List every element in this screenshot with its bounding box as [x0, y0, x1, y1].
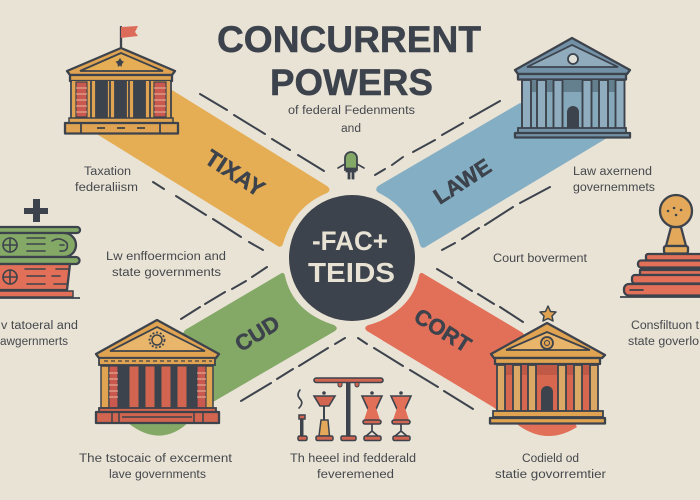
label: right edge: Consfiltuon t [631, 320, 700, 332]
label: court: Court boverment [493, 253, 588, 265]
icon: small figure [338, 152, 364, 179]
band label: CORT: CORT [410, 303, 476, 358]
band label: TIXAY: TIXAY [200, 144, 270, 202]
label: left edge: v tatoeral and [1, 320, 78, 332]
label: bottom right [495, 453, 606, 481]
subtitle [288, 105, 415, 135]
label: bottom left: The tstocaic of excerment [79, 453, 233, 465]
label: right edge [628, 320, 700, 348]
center circle: -FAC+ [312, 226, 388, 256]
label: law enforcement [106, 251, 226, 279]
label: bottom right: Codield od [522, 453, 579, 465]
title: POWERS [270, 62, 433, 103]
icon: red band building [490, 306, 605, 424]
label: bottom center [290, 453, 416, 481]
label: law amend: Law axernend [573, 166, 652, 178]
label: law enforcement: Lw enffoermcion and [106, 251, 226, 263]
subtitle: of federal Fedenments [288, 105, 415, 117]
label: left edge: awgernmerts [0, 336, 68, 348]
subtitle: and [341, 123, 361, 135]
label: bottom left [79, 453, 233, 481]
label: law amend [573, 166, 655, 194]
label: taxation [75, 166, 138, 194]
band label: CUD: CUD [230, 310, 284, 357]
label: bottom right: statie govorremtier [495, 469, 606, 481]
label: bottom left: lave governments [109, 469, 206, 481]
band: law [376, 103, 607, 248]
title [217, 19, 481, 103]
band: taxation [95, 90, 330, 247]
center circle [283, 189, 421, 327]
icon: yellow building with flag [65, 26, 178, 134]
label: law enforcement: state governments [112, 267, 221, 279]
center circle: TEIDS [308, 257, 395, 288]
icon: stacked law books with plus [0, 199, 80, 298]
label: left edge [0, 320, 78, 348]
label: taxation: federaliism [75, 182, 138, 194]
dashed connector lines [153, 94, 550, 409]
label: bottom center: Th heeel ind fedderald [290, 453, 416, 465]
icon: green band building [96, 320, 219, 423]
icon: blue building [515, 38, 630, 138]
band: cud [128, 273, 337, 436]
band label: LAWE: LAWE [429, 154, 496, 209]
label: law amend: governemmets [573, 182, 655, 194]
title: CONCURRENT [217, 19, 481, 60]
label: bottom center: feveremened [317, 469, 394, 481]
icon: scales and goblets [298, 378, 411, 440]
icon: pedestal with round head [620, 195, 700, 297]
label: right edge: state goverlo [628, 336, 699, 348]
label: taxation: Taxation [84, 166, 131, 178]
band: court [365, 273, 577, 436]
